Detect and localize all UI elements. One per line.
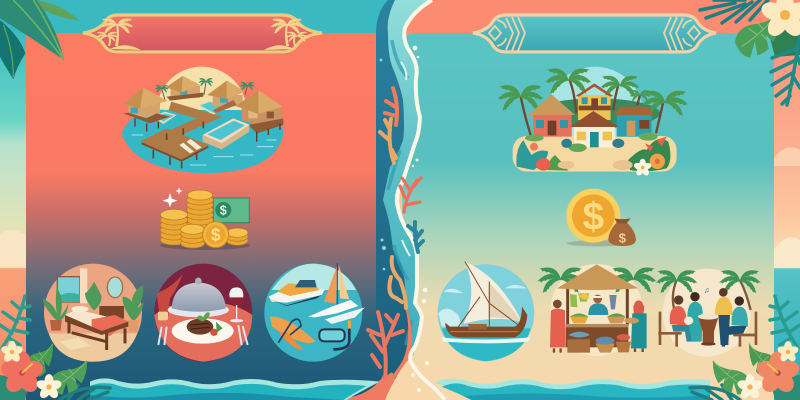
- foam bubbles: [411, 46, 429, 392]
- spa cabinet: [99, 306, 124, 319]
- divider coral ribbon: [335, 307, 412, 400]
- dark leaf behind flower: [0, 375, 30, 400]
- sail: [463, 262, 522, 324]
- upper orange coral: [385, 88, 397, 125]
- background bushes: [533, 98, 660, 128]
- main pool: [203, 118, 250, 143]
- foliage left: [516, 140, 548, 170]
- cloche base: [168, 303, 229, 317]
- monstera leaves: [25, 343, 53, 378]
- jet ski: [269, 289, 325, 303]
- background: right strip cloud: [774, 147, 800, 166]
- hut 3: [207, 81, 245, 113]
- blue house: [617, 115, 652, 137]
- background: right strip low cloud: [774, 238, 800, 268]
- foliage right: [628, 139, 670, 171]
- left coin stack: [160, 209, 188, 245]
- back palms: [155, 77, 255, 93]
- right frond: [771, 33, 800, 105]
- centre shrubs: [569, 143, 587, 152]
- fish crate: [567, 339, 590, 353]
- musical notes: ♫: [704, 286, 709, 295]
- banner palm: left: [96, 15, 141, 50]
- tan ribbon coral: [389, 257, 406, 308]
- right banner: [473, 15, 716, 54]
- middle red coral: [400, 178, 421, 212]
- circle: spa treatment room: [43, 264, 144, 362]
- music palms: [673, 280, 751, 312]
- plate: [172, 318, 234, 344]
- bottom wave: right: [435, 379, 710, 400]
- woman singer: [690, 292, 700, 301]
- hut 4: [236, 90, 283, 142]
- plumeria flower: [759, 0, 800, 40]
- divider pale water: [383, 0, 432, 356]
- icon: coins and cash: $: [220, 203, 227, 217]
- sun dome: [157, 67, 247, 157]
- stall posts: [568, 288, 627, 325]
- sparkles: [163, 187, 182, 207]
- divider swirl streaks: [388, 40, 412, 345]
- money bag: [608, 223, 636, 246]
- cloche dome: [172, 283, 226, 312]
- icon: coins and cash: [160, 187, 250, 250]
- icon: coin and money bag: [566, 189, 636, 246]
- background: right outer sky and sea strip: [400, 0, 800, 400]
- icon: coin and money bag: $: [619, 231, 627, 246]
- table: [154, 301, 252, 362]
- panel: left luxury resort: [26, 33, 378, 400]
- clouds: [438, 285, 527, 327]
- middle blue coral: [408, 222, 423, 252]
- left wave deep band: [90, 393, 343, 400]
- steak: [187, 319, 213, 335]
- icon: coin and money bag: $: [583, 195, 604, 238]
- illustration: local village houses: [497, 63, 688, 177]
- spa floor: [49, 333, 137, 362]
- djembe drum: [698, 317, 718, 343]
- left wave mid band: [90, 383, 367, 400]
- sailboat sails: [324, 265, 337, 303]
- plumeria flowers: [776, 341, 800, 363]
- woman in teal dress: [634, 300, 643, 309]
- illustration: overwater villas: [122, 67, 283, 173]
- frond: [0, 296, 30, 348]
- right coin stack: [227, 228, 248, 245]
- standing man: [719, 288, 728, 297]
- tall coin stack: [187, 190, 213, 240]
- thatched roof: [557, 264, 638, 290]
- yellow house: [578, 95, 611, 120]
- central wave divider: [335, 0, 450, 400]
- foliage: top right leaves and flower: [700, 0, 800, 105]
- palm crowns: [497, 63, 688, 117]
- front coin stack: [181, 224, 205, 248]
- background: left strip cloud: [0, 230, 26, 268]
- hibiscus: [0, 351, 45, 396]
- dark frond over wave: [690, 385, 740, 400]
- frond: [770, 296, 800, 348]
- shadow: [567, 240, 627, 246]
- sky dome: [547, 67, 643, 163]
- background: left outer sky and sea strip: [0, 0, 400, 400]
- plumeria flowers: [0, 341, 24, 363]
- sea: [442, 328, 531, 361]
- curtain: [157, 274, 183, 317]
- massage table: [65, 309, 128, 331]
- hut 1: [123, 88, 170, 132]
- pools: [197, 101, 227, 115]
- circle: water sports: [264, 263, 365, 362]
- spa mirror: [107, 277, 123, 298]
- gold coin: [566, 189, 620, 243]
- vendor: [593, 295, 602, 303]
- upper tan coral: [380, 119, 396, 163]
- spa window: [57, 277, 80, 302]
- right wave mid band: [442, 383, 710, 400]
- coral house: [533, 115, 572, 137]
- right wave deep band: [463, 393, 710, 400]
- banner palm: right: [264, 15, 308, 50]
- hanging goods: [570, 293, 589, 307]
- dock walkway: [160, 106, 209, 139]
- hull: [445, 307, 527, 337]
- monstera leaf: [735, 10, 780, 58]
- circle: traditional sailboat: [438, 262, 534, 361]
- divider light streak: [401, 62, 410, 256]
- illustration: local market stall: [537, 262, 657, 356]
- banner ornament: right: [664, 17, 700, 51]
- icon: coins and cash: $: [211, 225, 221, 245]
- banknote: [213, 198, 249, 223]
- lagoon: [122, 110, 283, 173]
- cutlery: [158, 325, 248, 345]
- banner ornament: left: [489, 17, 525, 51]
- dark green behind flower: [768, 28, 800, 57]
- foliage: bottom left leaves and flowers: [0, 296, 110, 400]
- shadow: [160, 241, 250, 250]
- hut 2: [166, 76, 203, 101]
- woman in coral dress: [553, 300, 562, 308]
- market palms: [537, 262, 657, 294]
- panel: right local community: [402, 33, 774, 400]
- divider sand base: [385, 358, 450, 400]
- dark frond over wave: [60, 385, 110, 400]
- upper dark frond: [700, 0, 768, 23]
- spa curtain: [80, 268, 87, 303]
- garnish: [196, 312, 210, 322]
- foliage: bottom right leaves and flowers: [690, 296, 800, 400]
- bottom wave: left: [90, 378, 380, 400]
- big front coin: [203, 222, 229, 248]
- foliage: top left palm leaves: [0, 0, 79, 79]
- drummer: [674, 295, 683, 305]
- spa towel and rug: [60, 337, 91, 350]
- catamaran: [308, 300, 358, 317]
- left banner: [83, 15, 322, 54]
- pale bubbles on dark band: [380, 59, 386, 270]
- produce baskets on counter: [570, 314, 588, 323]
- wine glass: [229, 287, 243, 305]
- background: right top band: [400, 0, 800, 33]
- spa plants: [43, 282, 144, 322]
- sun loungers: [179, 139, 202, 153]
- divider white foam line: [397, 0, 445, 400]
- hibiscus: [755, 351, 800, 396]
- dark leaf behind flower: [770, 375, 800, 400]
- snorkel mask: [319, 329, 345, 341]
- monstera leaves: [749, 343, 777, 378]
- circle: fine dining: [154, 264, 252, 362]
- white house: [574, 127, 615, 147]
- candle: [158, 312, 168, 320]
- background: left top band: [0, 0, 392, 33]
- seated man: [735, 296, 744, 306]
- divider coral mound: [335, 372, 396, 400]
- lower red coral: [368, 312, 403, 378]
- illustration: community music circle: [656, 266, 761, 357]
- sand ground: [513, 136, 677, 172]
- sky: [272, 264, 356, 290]
- chairs: [658, 312, 757, 347]
- back palms: [521, 79, 663, 135]
- baskets: [595, 343, 615, 353]
- counter: [566, 324, 628, 347]
- water ripples: [132, 135, 277, 165]
- paddleboard: [270, 317, 316, 343]
- sand path patches: [613, 160, 633, 170]
